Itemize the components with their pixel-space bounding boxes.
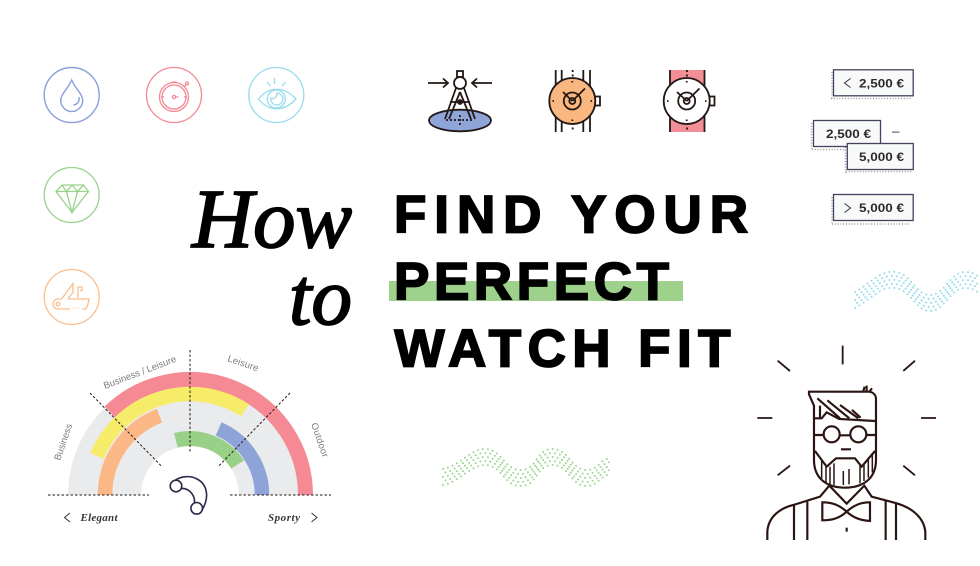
link logo — [170, 477, 207, 514]
suspenders — [794, 501, 896, 540]
light rays — [757, 346, 936, 475]
icon: eye — [249, 68, 304, 122]
title: find your perfect watch fit: PERFECT — [394, 252, 669, 311]
blue dotted wave — [855, 272, 979, 311]
green ring — [176, 439, 238, 465]
price tag: 2,500 to 5,000 euros: 2,500 € — [826, 127, 871, 141]
shirt button — [843, 528, 850, 532]
price tag: over 5,000 euros: 5,000 € — [859, 201, 904, 215]
axis label: sporty: Sporty — [268, 512, 300, 524]
category labels: Business — [52, 422, 75, 462]
heading: How to: to — [289, 251, 352, 342]
title: find your perfect watch fit: FIND YOUR — [394, 186, 748, 245]
price tag: 2,500 to 5,000 euros: 5,000 € — [859, 150, 904, 164]
pink ring — [110, 380, 306, 495]
dashed guide lines — [48, 350, 331, 495]
axis label: sporty — [268, 512, 317, 524]
heading: How to — [191, 173, 352, 342]
head outline — [809, 392, 876, 488]
heading: How to: How — [191, 173, 352, 266]
shoulders and collar — [767, 486, 925, 540]
yellow ring — [97, 394, 245, 456]
price tag: under 2,500 euros — [831, 70, 913, 100]
title: find your perfect watch fit: WATCH FIT — [394, 320, 730, 379]
price tag: under 2,500 euros: 2,500 € — [859, 76, 904, 90]
icon: diamond — [44, 168, 99, 222]
price tag: over 5,000 euros — [832, 194, 913, 224]
category labels: Outdoor — [308, 421, 330, 459]
glasses — [824, 426, 840, 442]
title: find your perfect watch fit — [389, 186, 748, 379]
axis label: elegant: Elegant — [80, 512, 118, 524]
beard lines — [822, 454, 872, 485]
rainbow chart: watch styles — [48, 350, 331, 524]
nose and moustache — [815, 449, 875, 467]
icon: pocket knife — [44, 270, 99, 324]
category labels — [52, 353, 330, 462]
green dotted wave — [443, 449, 611, 486]
hair — [815, 386, 875, 421]
gray base ring — [68, 373, 312, 495]
category labels: Leisure — [226, 353, 260, 374]
icon: water drop — [44, 68, 99, 122]
orange ring — [105, 416, 160, 495]
icon: stopwatch — [146, 68, 202, 122]
category labels: Business / Leisure — [102, 354, 178, 392]
icon: watch with pink strap — [664, 70, 714, 132]
blue ring — [219, 429, 262, 495]
illustration: bearded man with bow tie — [757, 346, 936, 540]
axis label: elegant — [64, 512, 118, 524]
icon: watch with orange dial — [549, 70, 600, 132]
highlight behind perfect — [389, 281, 683, 301]
icon: compass sizing a wrist — [428, 71, 492, 131]
price tag: 2,500 to 5,000 euros — [812, 120, 913, 173]
bow tie — [822, 502, 870, 521]
